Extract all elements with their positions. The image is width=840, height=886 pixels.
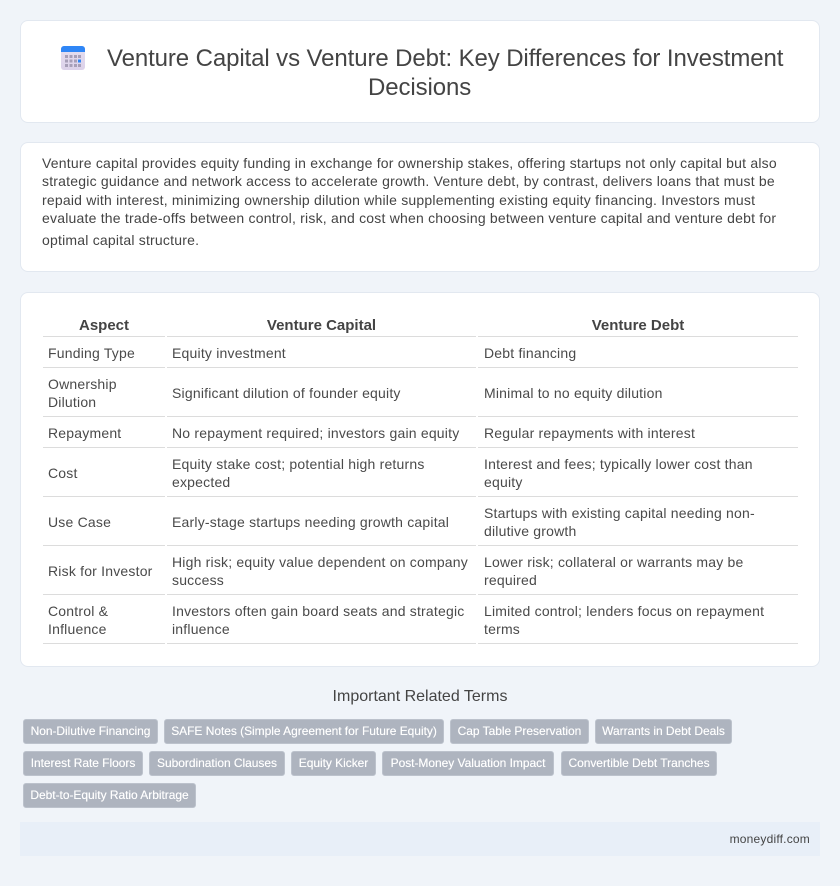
- row: cost: Cost: [48, 465, 78, 481]
- row: risk for investor: [48, 554, 744, 588]
- comparison table: [43, 317, 798, 644]
- row: use case: Startups with existing capital needing non-: [484, 505, 755, 521]
- comparison table panel: [20, 292, 820, 667]
- row: cost: Interest and fees; typically lower cost than: [484, 456, 753, 472]
- row: risk for investor: Risk for Investor: [48, 563, 153, 579]
- related terms tags: Warrants in Debt Deals: [602, 724, 725, 738]
- related terms tags: Equity Kicker: [299, 756, 368, 770]
- row: funding type: Equity investment: [172, 345, 286, 361]
- intro text: [42, 155, 777, 248]
- footer bar: [20, 822, 820, 856]
- title: Venture Capital vs Venture Debt: Key Differences for Investment: [107, 45, 783, 72]
- icon: calendar: [61, 46, 85, 70]
- table header: Venture Capital: [267, 317, 376, 334]
- row: use case: Early-stage startups needing growth capital: [172, 514, 449, 530]
- intro text: evaluate the trade-offs between control, risk, and cost when choosing between venture capital and venture debt for: [42, 210, 776, 226]
- related terms tags: Post-Money Valuation Impact: [391, 756, 545, 770]
- title: [107, 45, 784, 101]
- related terms tags: Interest Rate Floors: [31, 756, 135, 770]
- row: repayment: No repayment required; investors gain equity: [172, 425, 459, 441]
- row: use case: [48, 505, 755, 539]
- intro panel: [20, 142, 820, 272]
- title: Decisions: [368, 74, 471, 101]
- row: funding type: [48, 345, 576, 361]
- intro text: Venture capital provides equity funding in exchange for ownership stakes, offering startups not only capital but also: [42, 155, 777, 171]
- row: cost: Equity stake cost; potential high returns: [172, 456, 425, 472]
- table header: Aspect: [79, 317, 129, 334]
- row: funding type: Funding Type: [48, 345, 135, 361]
- row: repayment: Repayment: [48, 425, 121, 441]
- header panel: [20, 20, 820, 123]
- row: control and influence: Influence: [48, 621, 107, 637]
- row: risk for investor: High risk; equity value dependent on company: [172, 554, 468, 570]
- intro text: strategic guidance and network access to accelerate growth. Venture debt, by contrast, delivers loans that must be: [42, 173, 775, 189]
- row: cost: expected: [172, 474, 230, 490]
- row: control and influence: [48, 603, 764, 637]
- related terms tags: Cap Table Preservation: [458, 724, 581, 738]
- row: control and influence: terms: [484, 621, 520, 637]
- row: cost: [48, 456, 753, 490]
- related terms tags: Subordination Clauses: [157, 756, 277, 770]
- related terms tags: [23, 719, 732, 808]
- row: control and influence: Limited control; lenders focus on repayment: [484, 603, 764, 619]
- row: risk for investor: required: [484, 572, 537, 588]
- row: control and influence: influence: [172, 621, 230, 637]
- table header: [79, 317, 684, 334]
- row: risk for investor: Lower risk; collateral or warrants may be: [484, 554, 744, 570]
- row: ownership dilution: Minimal to no equity dilution: [484, 385, 663, 401]
- row: risk for investor: success: [172, 572, 224, 588]
- row: ownership dilution: [48, 376, 663, 410]
- related terms tags: SAFE Notes (Simple Agreement for Future Equity): [171, 724, 437, 738]
- related terms tags: Debt-to-Equity Ratio Arbitrage: [30, 788, 189, 802]
- row: use case: Use Case: [48, 514, 111, 530]
- intro text: repaid with interest, minimizing ownership dilution while supplementing existing equity financing. Investors must: [42, 192, 755, 208]
- related terms heading: Important Related Terms: [333, 688, 507, 705]
- row: funding type: Debt financing: [484, 345, 576, 361]
- row: ownership dilution: Dilution: [48, 394, 96, 410]
- row: control and influence: Control &: [48, 603, 108, 619]
- row: control and influence: Investors often gain board seats and strategic: [172, 603, 464, 619]
- footer source label: moneydiff.com: [730, 832, 810, 846]
- row: use case: dilutive growth: [484, 523, 576, 539]
- related terms tags: Non-Dilutive Financing: [31, 724, 150, 738]
- row: cost: equity: [484, 474, 523, 490]
- row: repayment: [48, 425, 695, 441]
- row: ownership dilution: Significant dilution of founder equity: [172, 385, 401, 401]
- related terms tags: Convertible Debt Tranches: [568, 756, 710, 770]
- table header: Venture Debt: [592, 317, 684, 334]
- row: repayment: Regular repayments with interest: [484, 425, 695, 441]
- row: ownership dilution: Ownership: [48, 376, 117, 392]
- intro text: optimal capital structure.: [42, 232, 199, 248]
